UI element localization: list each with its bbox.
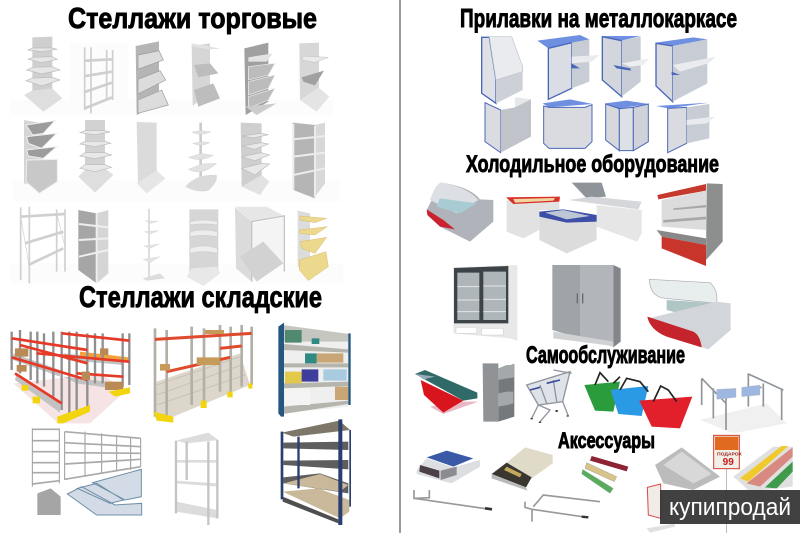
- glass curved display: [647, 279, 731, 349]
- steel double door fridge: [552, 265, 621, 347]
- title: warehouse shelving: Стеллажи складские: [79, 281, 322, 314]
- rack 14: [78, 210, 108, 283]
- rack 3: [136, 41, 168, 115]
- shopping cart: [527, 370, 572, 423]
- electronic scale: [417, 451, 480, 483]
- rack 5: [244, 43, 277, 115]
- pallet rack with red beams: [12, 330, 130, 423]
- plastic tray: [655, 447, 720, 490]
- rack 12: [293, 123, 325, 198]
- hook 2: [525, 495, 600, 522]
- red basket: [639, 386, 692, 428]
- panel: retail shelving grid: [10, 37, 343, 286]
- red poster stand: [647, 484, 675, 533]
- watermark badge: купипродай: [669, 494, 791, 521]
- panel: accessories: [414, 435, 793, 533]
- checkout counter: [415, 370, 478, 414]
- curved display fridge: [427, 183, 493, 242]
- price tag holders: [582, 456, 628, 493]
- rack 7: [24, 120, 57, 193]
- rack 1: [24, 37, 62, 112]
- rack 16: [187, 209, 220, 286]
- soft backdrop behind racks: [10, 43, 343, 283]
- green basket: [584, 373, 620, 412]
- panel: refrigeration: [427, 183, 723, 266]
- dark rack with wood shelves: [281, 419, 351, 525]
- rack 2: [85, 47, 113, 113]
- open multideck fridge: [657, 183, 723, 266]
- title: refrigeration equipment: Холодильное оборудование: [466, 151, 719, 178]
- blue basket: [611, 378, 648, 416]
- promo price sign: ПОДАРОК: [717, 451, 743, 457]
- red lid freezer: [506, 197, 560, 238]
- rack 13: [21, 207, 65, 283]
- rack 8: [78, 120, 113, 193]
- panel: counters: [482, 35, 716, 153]
- rack 18: [298, 211, 328, 281]
- panel: refrigeration lower row: [453, 265, 731, 349]
- title: retail shelving: Стеллажи торговые: [68, 3, 317, 35]
- blue lid freezer: [539, 209, 597, 253]
- counter 3: [602, 36, 649, 97]
- rack 11: [241, 123, 269, 195]
- rack 4: [192, 43, 221, 107]
- counter 1: [482, 37, 523, 103]
- rack 9: [137, 122, 166, 193]
- swing gates: [700, 373, 787, 433]
- rack 10: [185, 123, 217, 191]
- pole for sign: [726, 467, 727, 533]
- promo price sign: [714, 435, 743, 469]
- cash drawer: [492, 447, 553, 491]
- light modular shelves with parts: [32, 428, 142, 515]
- title: self-service: Самообслуживание: [526, 342, 685, 369]
- chest freezer with open lid: [568, 183, 642, 242]
- rack 15: [143, 209, 165, 281]
- counter 7: [605, 101, 649, 151]
- rack 17: [235, 207, 284, 282]
- hook 1: [414, 490, 492, 509]
- white shelf unit: [176, 433, 218, 525]
- panel: warehouse shelving grid: [12, 323, 351, 525]
- title: accessories: Аксессуары: [558, 428, 655, 453]
- blue metal rack with goods: [278, 323, 351, 417]
- counter 6: [543, 99, 593, 148]
- glass door fridge: [453, 265, 517, 341]
- counter 8: [656, 103, 715, 153]
- counter 4: [656, 37, 716, 102]
- locker cabinet: [483, 363, 514, 422]
- counter 2: [537, 35, 599, 99]
- promo price sign: 99: [723, 457, 734, 468]
- rack 6: [299, 43, 329, 112]
- pallet rack with boxes: [153, 325, 252, 423]
- counter 5: [485, 97, 531, 153]
- colored poster frames: [733, 446, 793, 492]
- panel: self-service: [415, 363, 787, 433]
